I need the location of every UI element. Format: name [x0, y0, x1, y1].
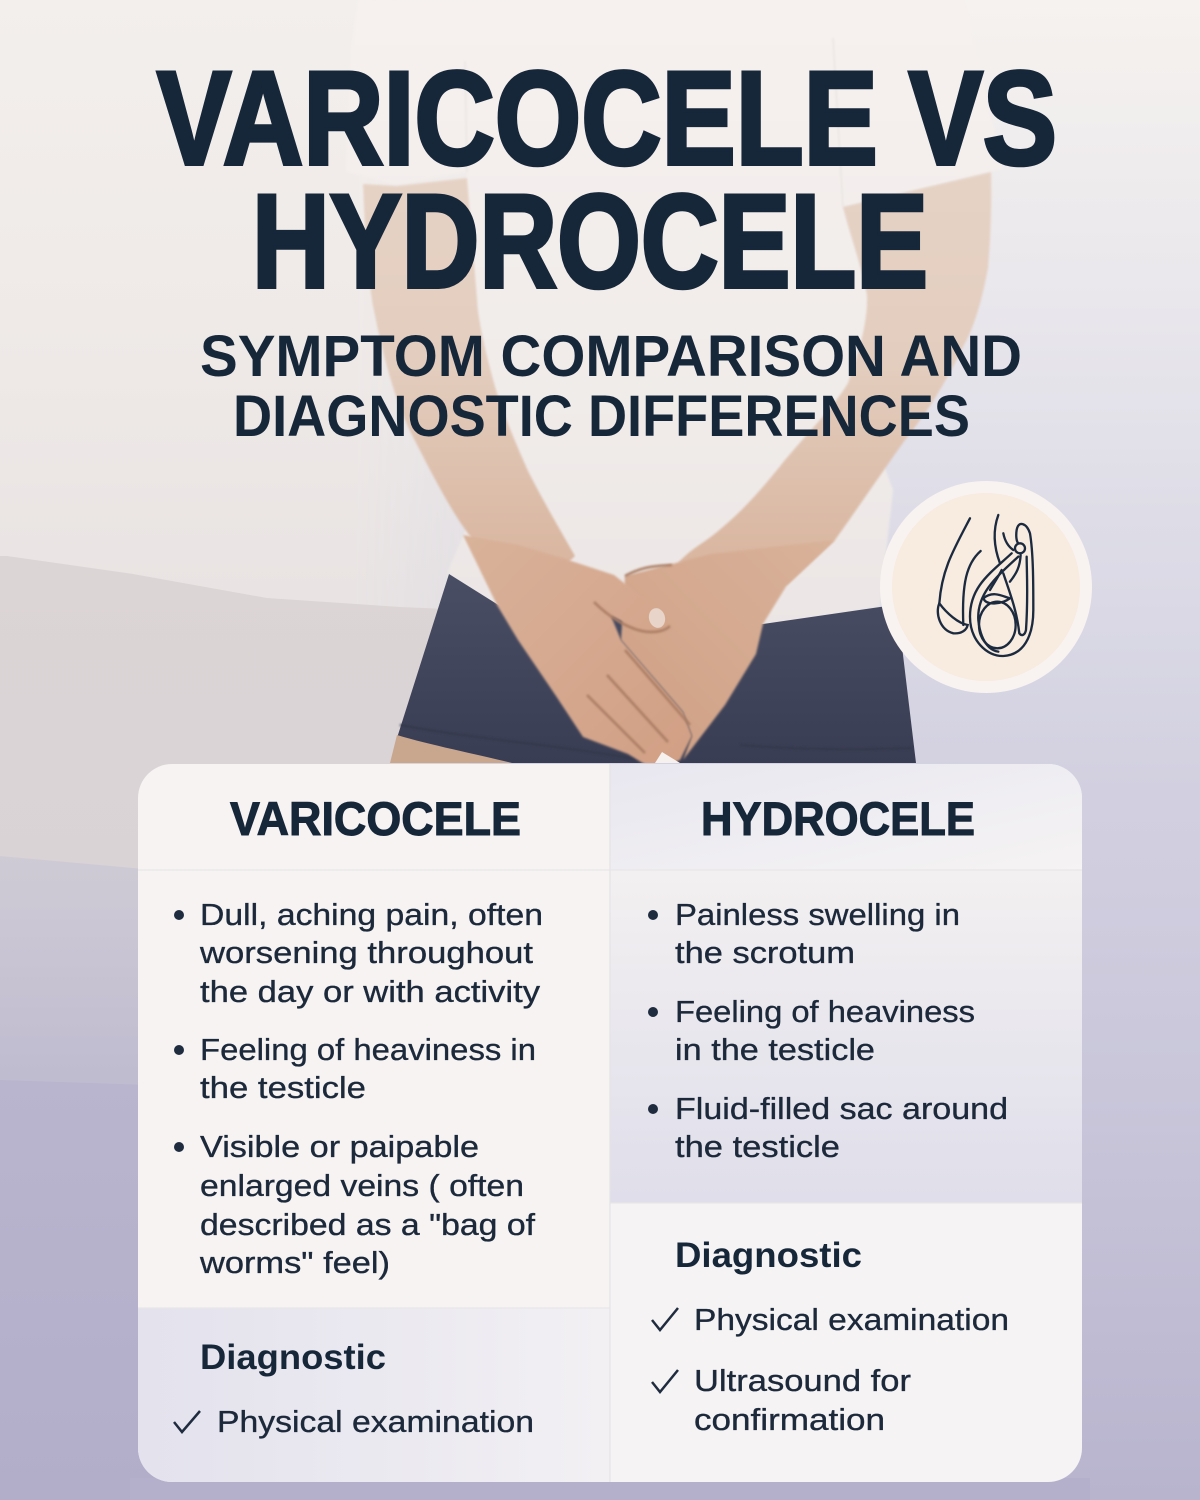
photo: man holding groin	[362, 172, 992, 763]
symptom list: varicocele: worsening throughout	[199, 935, 533, 970]
subtitle: DIAGNOSTIC DIFFERENCES	[233, 384, 970, 449]
thigh	[390, 735, 512, 763]
diagnostic: varicocele	[174, 1338, 534, 1439]
comparison table	[138, 764, 1082, 1482]
subtitle	[200, 324, 1022, 449]
title: HYDROCELE	[252, 168, 928, 316]
diagnostic: hydrocele: Ultrasound for	[694, 1363, 911, 1398]
symptom list: varicocele	[174, 897, 543, 1280]
shorts	[397, 574, 916, 763]
heading: hydrocele: HYDROCELE	[701, 792, 975, 845]
symptom list: varicocele: worms" feel)	[199, 1245, 390, 1280]
diagnostic: hydrocele	[652, 1236, 1009, 1437]
shirt tail	[655, 752, 680, 763]
icon: anatomy circle	[880, 481, 1092, 693]
symptom list: hydrocele: the testicle	[675, 1129, 840, 1164]
symptom list: varicocele: described as a "bag of	[200, 1207, 535, 1242]
symptom list: hydrocele: Painless swelling in	[675, 897, 960, 932]
symptom list: varicocele: Dull, aching pain, often	[200, 897, 543, 932]
right arm	[678, 172, 991, 585]
symptom list: varicocele: the day or with activity	[200, 974, 541, 1009]
diagnostic: hydrocele: Physical examination	[694, 1302, 1009, 1337]
symptom list: hydrocele: in the testicle	[675, 1032, 875, 1067]
hand creases	[587, 565, 690, 753]
symptom list: hydrocele: the scrotum	[675, 935, 855, 970]
symptom list: hydrocele: Feeling of heaviness	[675, 994, 975, 1029]
thumbnail	[648, 608, 666, 628]
diagnostic: varicocele: Physical examination	[217, 1404, 534, 1439]
left hand	[463, 535, 692, 767]
shirt	[452, 259, 893, 624]
subtitle: SYMPTOM COMPARISON AND	[200, 324, 1022, 389]
diagnostic: hydrocele: Diagnostic	[675, 1236, 862, 1275]
panel: varicocele	[174, 792, 543, 1439]
symptom list: varicocele: Visible or paipable	[200, 1129, 479, 1164]
right hand	[621, 540, 835, 760]
diagnostic: varicocele: Diagnostic	[200, 1338, 386, 1377]
symptom list: varicocele: the testicle	[200, 1070, 366, 1105]
symptom list: varicocele: enlarged veins ( often	[200, 1168, 524, 1203]
symptom list: varicocele: Feeling of heaviness in	[200, 1032, 536, 1067]
symptom list: hydrocele	[648, 897, 1008, 1164]
heading: varicocele: VARICOCELE	[230, 792, 521, 845]
panel: hydrocele	[648, 792, 1009, 1437]
title	[157, 45, 1057, 316]
diagnostic: hydrocele: confirmation	[694, 1402, 885, 1437]
left arm	[362, 178, 576, 562]
symptom list: hydrocele: Fluid-filled sac around	[675, 1091, 1008, 1126]
